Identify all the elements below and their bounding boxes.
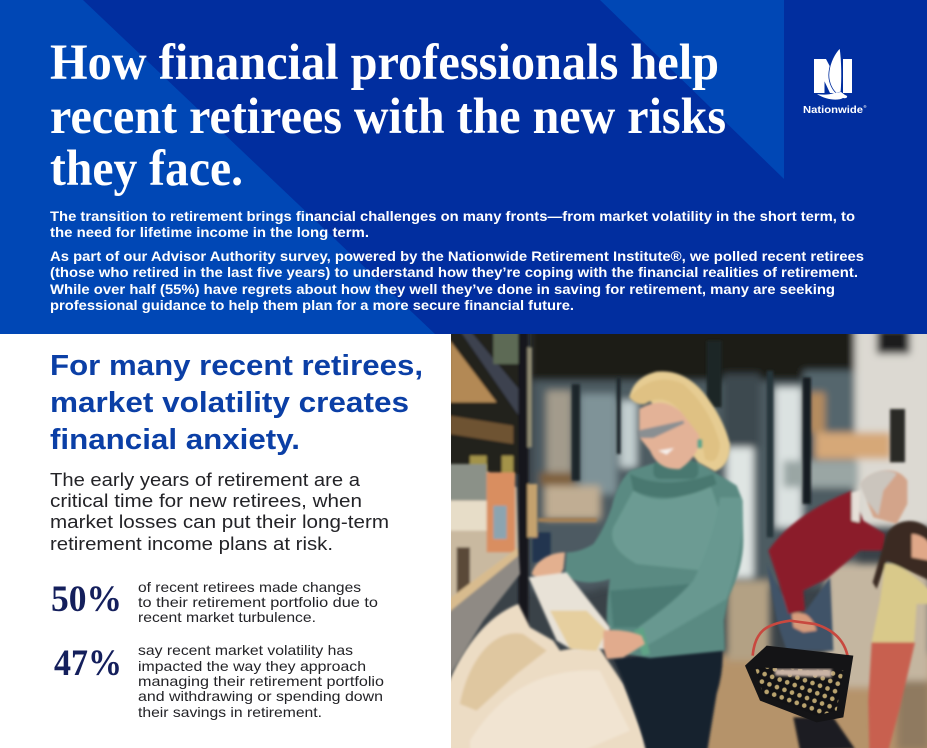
- statistic: 47 percent: managing their retirement portfolio: [138, 674, 384, 689]
- background: mullions and shelving: [443, 327, 905, 627]
- statistic: 50 percent: recent market turbulence.: [138, 610, 316, 625]
- text block: intro paragraph two: As part of our Advisor Authority survey, powered by the Nationwide Retirement Institute®, we polled recent retirees: [50, 248, 864, 264]
- statistic: 50 percent: to their retirement portfolio due to: [138, 595, 378, 610]
- text block: intro paragraph one: The transition to retirement brings financial challenges on many fronts—from market volatility in the short term, to: [50, 208, 855, 224]
- icon: Nationwide logo: ®: [864, 104, 866, 109]
- icon: Nationwide logo: [803, 48, 866, 116]
- text block: early years of retirement: retirement income plans at risk.: [50, 533, 333, 554]
- statistic: 47 percent: their savings in retirement.: [138, 705, 322, 720]
- statistic: 47 percent: say recent market volatility has: [138, 643, 353, 658]
- statistic: 50 percent: [51, 579, 378, 625]
- text block: early years of retirement: The early years of retirement are a: [50, 469, 361, 490]
- text block: intro paragraph two: [50, 248, 864, 313]
- title: How financial professionals help: [50, 34, 719, 90]
- statistic: 47 percent: 47%: [54, 643, 122, 684]
- background: store windows and wall: [530, 324, 927, 748]
- text block: intro paragraph one: [50, 208, 855, 240]
- statistic: 50 percent: 50%: [51, 579, 122, 620]
- heading: market volatility: financial anxiety.: [50, 424, 300, 456]
- panel: header background: [0, 0, 927, 334]
- statistic: 47 percent: and withdrawing or spending down: [138, 689, 383, 704]
- text block: early years of retirement: critical time for new retirees, when: [50, 490, 362, 511]
- woman: jeans: [613, 642, 723, 748]
- icon: Nationwide logo: Nationwide: [803, 105, 863, 116]
- text block: intro paragraph two: (those who retired in the last five years) to understand how they’re coping with the financial realities of retirement.: [50, 264, 858, 280]
- statistic: 47 percent: [54, 643, 384, 720]
- text block: intro paragraph two: While over half (55%) have regrets about how they well they’ve done in saving for retirement, many are seeking: [50, 281, 835, 297]
- left shelf products: [447, 464, 520, 681]
- woman: hands and bag: [529, 552, 645, 659]
- girl: [868, 521, 927, 748]
- heading: market volatility: For many recent retirees,: [50, 350, 423, 382]
- woman: face and hair: [629, 371, 730, 471]
- title: recent retirees with the new risks: [50, 88, 726, 144]
- man in red sweater: [767, 470, 907, 748]
- woman: sweater: [565, 461, 743, 658]
- statistic: 47 percent: impacted the way they approach: [138, 659, 366, 674]
- text block: early years of retirement: market losses can put their long-term: [50, 511, 389, 532]
- text block: intro paragraph two: professional guidance to help them plan for a more secure financial future.: [50, 297, 574, 313]
- text block: early years of retirement: [50, 469, 389, 554]
- title: they face.: [50, 140, 243, 196]
- heading: market volatility: market volatility creates: [50, 387, 409, 419]
- title: [50, 34, 726, 196]
- photo: woman shopping in grocery store: [443, 324, 927, 748]
- shopping basket: [745, 621, 853, 722]
- statistic: 50 percent: of recent retirees made changes: [138, 580, 361, 595]
- bags of pasta: [447, 604, 650, 748]
- text block: intro paragraph one: the need for lifetime income in the long term.: [50, 224, 369, 240]
- heading: market volatility: [50, 350, 423, 456]
